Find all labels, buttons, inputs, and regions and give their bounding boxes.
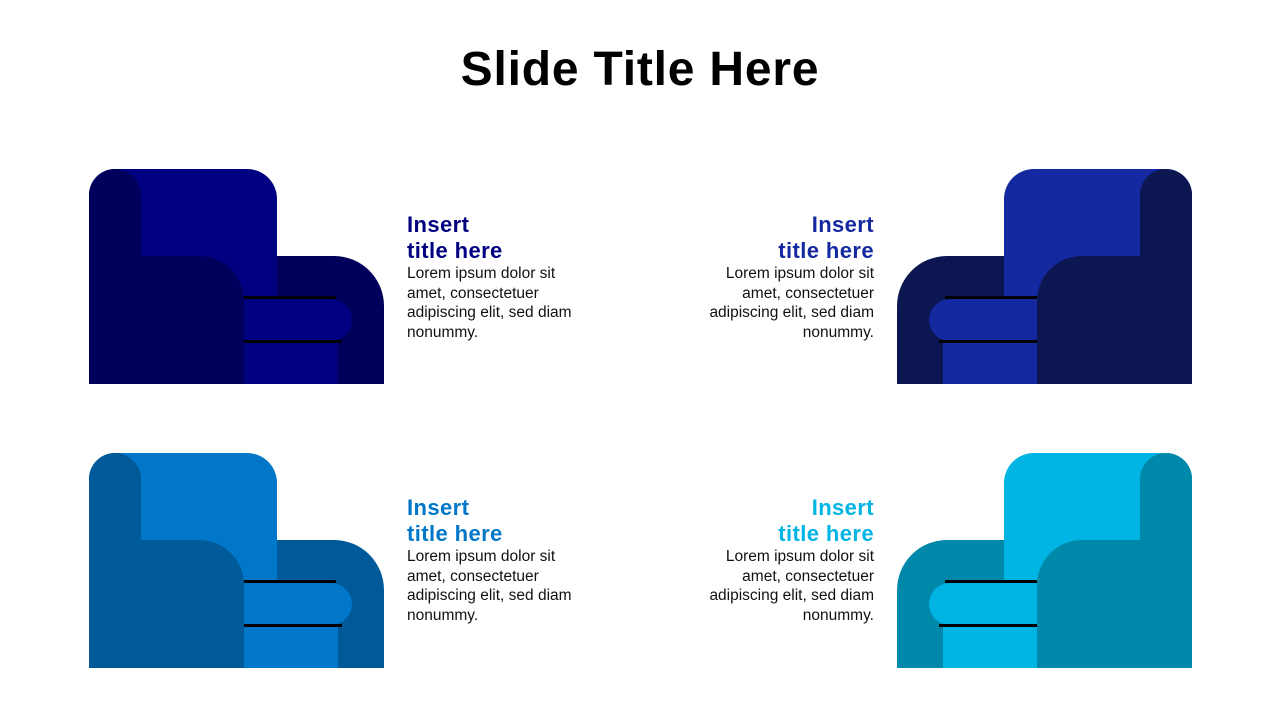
text block top-left: title here — [407, 238, 503, 263]
text block bottom-right: title here — [778, 521, 874, 546]
text block top-right: amet, consectetuer — [742, 284, 874, 302]
text block bottom-right: Lorem ipsum dolor sit — [726, 548, 874, 565]
text block top-right: Insert — [812, 212, 874, 237]
text block top-right: Lorem ipsum dolor sit — [726, 265, 874, 282]
icon: chair top-right — [897, 169, 1192, 384]
text block bottom-left: nonummy. — [407, 606, 478, 624]
text block bottom-right — [709, 495, 874, 624]
text block top-left: adipiscing elit, sed diam — [407, 304, 572, 321]
text block top-left: Lorem ipsum dolor sit — [407, 265, 555, 282]
text block bottom-right: nonummy. — [803, 606, 874, 624]
text block top-left — [407, 212, 572, 340]
text block top-right — [709, 212, 874, 340]
icon: chair top-left — [89, 169, 384, 384]
text block bottom-right: amet, consectetuer — [742, 568, 874, 584]
icon: chair bottom-left — [89, 453, 384, 668]
text block top-right: nonummy. — [803, 324, 874, 340]
text block bottom-right: adipiscing elit, sed diam — [709, 587, 874, 604]
text block bottom-left: title here — [407, 521, 503, 546]
text block top-right: title here — [778, 238, 874, 263]
text block bottom-left: amet, consectetuer — [407, 568, 539, 584]
text block bottom-left: Lorem ipsum dolor sit — [407, 548, 555, 565]
icon: chair bottom-right — [897, 453, 1192, 668]
text block bottom-right: Insert — [812, 495, 874, 520]
text block top-left: Insert — [407, 212, 469, 237]
text block bottom-left — [407, 495, 572, 624]
text block top-left: nonummy. — [407, 324, 478, 340]
text block bottom-left: Insert — [407, 495, 469, 520]
text block bottom-left: adipiscing elit, sed diam — [407, 587, 572, 604]
text block top-left: amet, consectetuer — [407, 284, 539, 302]
text block top-right: adipiscing elit, sed diam — [709, 304, 874, 321]
title: Slide Title Here — [461, 43, 819, 96]
